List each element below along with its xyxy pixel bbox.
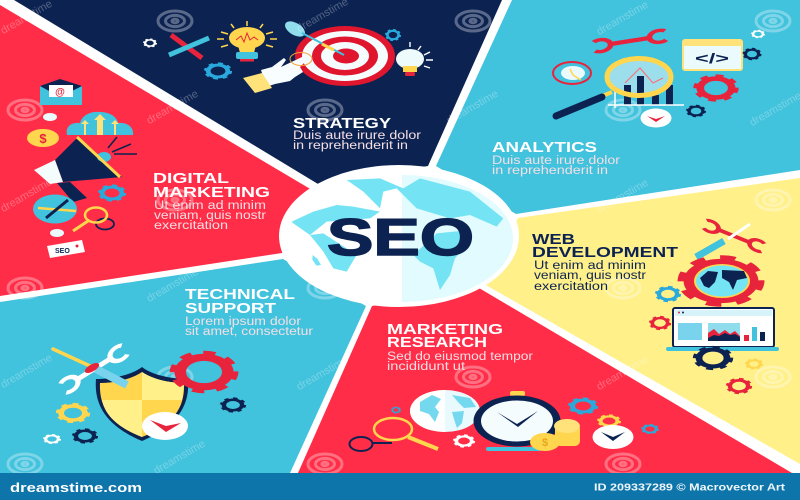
icon: light bulb xyxy=(217,21,277,62)
text: web development: DEVELOPMENT xyxy=(532,244,678,261)
icon: white light bulb xyxy=(396,42,433,76)
icon: small pill lower xyxy=(50,229,64,237)
panel: web development wedge xyxy=(484,178,800,464)
icon: globe xyxy=(410,390,480,432)
icon: small cyan gear xyxy=(392,407,400,413)
icon: cyan gear xyxy=(570,399,596,413)
icon: navy gear xyxy=(695,347,731,369)
text: analytics: in reprehenderit in xyxy=(492,165,608,177)
text: web development: Ut enim ad minim xyxy=(534,260,646,272)
text: web development: exercitation xyxy=(534,281,608,293)
icon: seo tag: SEO xyxy=(55,248,70,255)
text: digital marketing: MARKETING xyxy=(153,184,270,201)
watermark text: dreamstime xyxy=(595,354,650,393)
icon: navy gear right xyxy=(222,398,244,412)
icon: red gear xyxy=(650,317,670,329)
icon: magnifier xyxy=(73,208,114,231)
icon: cyan base xyxy=(486,447,541,451)
icon: yellow gear xyxy=(58,404,88,422)
icon: envelope xyxy=(40,79,82,105)
text: web development: veniam, quis nostr xyxy=(534,270,646,282)
icon: small white gear xyxy=(752,30,764,38)
icon: white wrench xyxy=(60,344,128,394)
icon: pointing hand xyxy=(243,52,312,93)
icon: check badge xyxy=(640,108,672,128)
text: digital marketing: Ut enim ad minim xyxy=(154,200,266,212)
panel: technical support wedge xyxy=(0,259,366,473)
icon: megaphone xyxy=(34,137,137,202)
map: continents xyxy=(292,178,503,290)
icon: white gear xyxy=(44,435,60,443)
text: strategy xyxy=(293,115,421,152)
icon: navy small gear xyxy=(687,106,705,116)
text: technical support: TECHNICAL xyxy=(185,286,295,303)
panel: digital marketing wedge xyxy=(0,5,312,296)
icon: clock xyxy=(474,391,560,446)
icon: magnifier xyxy=(350,418,438,451)
icon: coin stack: $ xyxy=(542,437,548,449)
icon: dollar coin xyxy=(27,129,59,147)
center globe xyxy=(279,165,519,307)
icon: dart xyxy=(282,18,344,55)
watermark text: dreamstime xyxy=(0,352,54,391)
panel: analytics wedge xyxy=(436,0,800,214)
icons: strategy xyxy=(144,18,433,93)
icon: laptop with charts xyxy=(666,308,779,351)
icon: red gear xyxy=(728,379,750,393)
text: analytics xyxy=(492,139,620,177)
panel: marketing research wedge xyxy=(298,288,792,473)
text: strategy: Duis aute irure dolor xyxy=(293,130,421,142)
title: SEO: SEO xyxy=(327,209,474,267)
text: digital marketing: veniam, quis nostr xyxy=(154,210,266,222)
text: technical support xyxy=(185,286,313,338)
icons: analytics xyxy=(553,30,764,128)
watermark text: dreamstime xyxy=(145,266,200,305)
text: marketing research xyxy=(387,321,533,373)
text: digital marketing: DIGITAL xyxy=(153,170,229,187)
text: marketing research: RESEARCH xyxy=(387,334,487,351)
text: marketing research: MARKETING xyxy=(387,321,503,338)
footer credit: ID 209337289 © Macrovector Art xyxy=(594,482,786,494)
text: technical support: Lorem ipsum dolor xyxy=(185,316,301,328)
text: strategy: in reprehenderit in xyxy=(293,140,408,152)
icon: code window xyxy=(683,40,742,70)
text: analytics: ANALYTICS xyxy=(492,139,597,156)
text: web development xyxy=(532,231,678,293)
panel: strategy wedge xyxy=(14,0,502,184)
watermark text: dreamstime xyxy=(295,354,350,393)
icon: navy gear left xyxy=(74,429,96,443)
icon: small pill xyxy=(43,113,57,121)
icon: crossed pencils xyxy=(169,35,209,58)
icon: white badge xyxy=(592,425,634,449)
icon: cloud with arrows xyxy=(67,112,133,135)
text: digital marketing: exercitation xyxy=(154,220,228,232)
icon: yellow gear xyxy=(598,415,620,427)
watermark text: dreamstime xyxy=(595,177,650,216)
icon: envelope: @ xyxy=(55,87,65,98)
icon: red wrench xyxy=(594,30,666,52)
icons: web development xyxy=(650,219,779,393)
icon: clock with arrow xyxy=(553,62,591,84)
text: web development: WEB xyxy=(532,231,575,248)
text: technical support: SUPPORT xyxy=(185,300,276,317)
text: strategy: STRATEGY xyxy=(293,115,391,132)
text: marketing research: incididunt ut xyxy=(387,361,466,373)
icon: code window: </> xyxy=(695,50,729,66)
icon: cyan gear xyxy=(206,64,230,78)
watermark text: dreamstime xyxy=(145,88,200,127)
icon: red gear xyxy=(174,354,234,390)
icon: navy gear xyxy=(744,49,760,59)
icon: coin stack xyxy=(530,419,580,451)
icon: wrench and screwdriver xyxy=(696,219,765,257)
icon: white gear xyxy=(144,39,156,47)
text: marketing research: Sed do eiusmod tempor xyxy=(387,351,533,363)
icon: blue gear right xyxy=(386,30,400,40)
footer bar xyxy=(0,473,800,500)
text: analytics: Duis aute irure dolor xyxy=(492,155,620,167)
icon: cyan gear xyxy=(657,287,679,301)
icon: dollar coin: $ xyxy=(39,131,47,146)
icon: yellow gear xyxy=(746,359,762,369)
icon: target xyxy=(295,26,395,86)
watermark text: dreamstime xyxy=(445,88,500,127)
icons: marketing research xyxy=(350,390,658,451)
icon: cyan gear xyxy=(100,186,124,200)
icon: gear with globe xyxy=(683,259,759,303)
watermark text: dreamstime xyxy=(595,0,650,38)
icon: circle with pencils xyxy=(33,194,77,224)
footer brand: dreamstime.com xyxy=(10,481,142,495)
watermark text: dreamstime xyxy=(0,176,54,215)
icon: small cyan gear xyxy=(642,425,658,433)
icon: big red gear xyxy=(696,76,736,100)
icon: shield xyxy=(96,367,188,441)
icons: technical support xyxy=(44,344,244,443)
chart: magnifier over bars xyxy=(556,57,684,116)
watermark text: dreamstime xyxy=(152,438,207,477)
icon: white gear xyxy=(454,435,474,447)
icons: digital marketing xyxy=(27,79,137,258)
icon: seo tag xyxy=(47,240,85,258)
text: technical support: sit amet, consectetur xyxy=(185,326,313,338)
icon: check badge xyxy=(142,412,188,440)
text: digital marketing xyxy=(153,170,270,232)
icon: screwdriver xyxy=(53,349,127,385)
